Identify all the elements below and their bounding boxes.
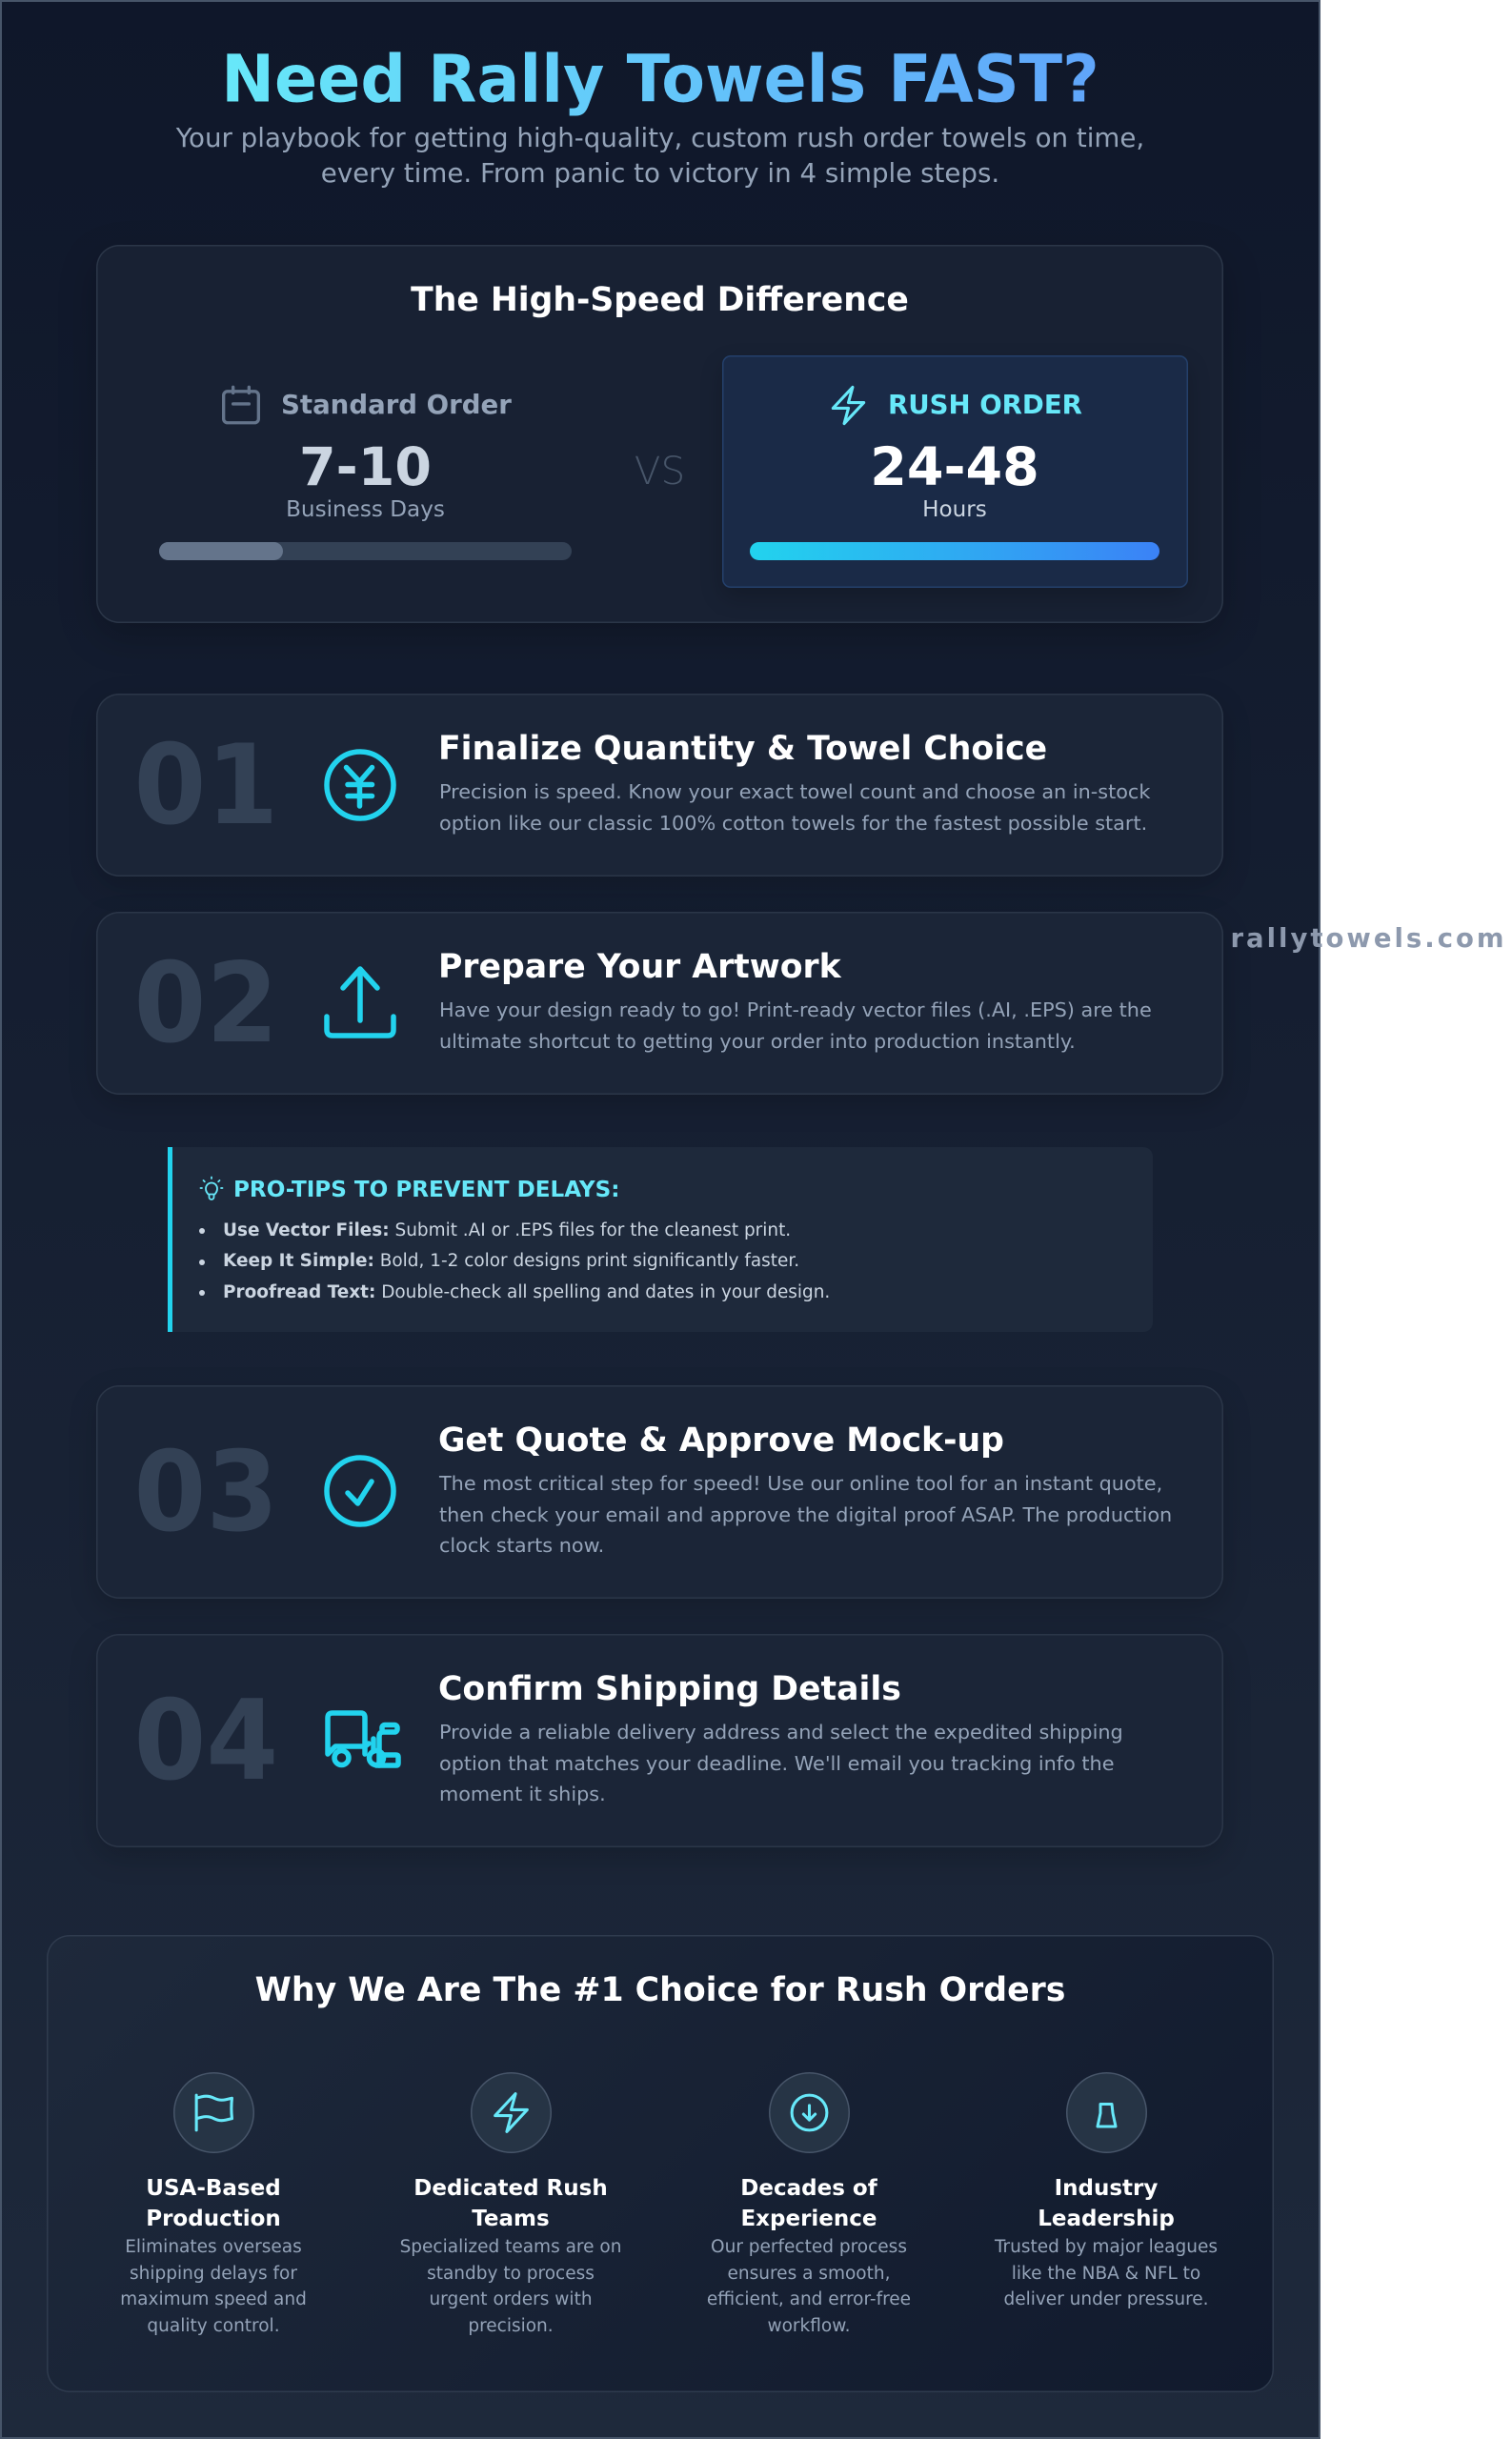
tip bullet list: [199, 1220, 830, 1301]
feature title: [1038, 2176, 1175, 2231]
feature title: Decades of: [740, 2176, 877, 2201]
callout heading: PRO-TIPS TO PREVENT DELAYS:: [233, 1178, 619, 1202]
subtitle: [175, 122, 1144, 189]
step number: 01: [133, 721, 278, 850]
feature description: standby to process: [427, 2264, 595, 2284]
rush order label: RUSH ORDER: [888, 389, 1082, 419]
step heading: Finalize Quantity & Towel Choice: [438, 730, 1047, 768]
icon: flag: [173, 2072, 253, 2153]
standard bar fill: [159, 541, 283, 560]
feature: industry leadership: [995, 2072, 1218, 2309]
feature description: [995, 2237, 1218, 2309]
vs label: VS: [635, 448, 685, 494]
icon: upload: [324, 966, 396, 1038]
callout accent bar: [168, 1147, 172, 1332]
tip two: Keep It Simple: Bold, 1-2 color designs print significantly faster.: [223, 1251, 799, 1271]
feature description: efficient, and error-free: [707, 2289, 911, 2309]
step 3: [96, 1385, 1223, 1599]
feature: decades of experience: [707, 2072, 911, 2336]
feature title: USA-Based: [146, 2176, 281, 2201]
subtitle: Your playbook for getting high-quality, custom rush order towels on time,: [176, 122, 1144, 153]
rush order time: 24-48: [870, 436, 1039, 497]
bullet: [199, 1260, 205, 1265]
feature description: [120, 2237, 307, 2336]
step description: Have your design ready to go! Print-ready vector files (.AI, .EPS) are the: [439, 998, 1152, 1021]
callout: pro tips: [168, 1147, 1153, 1332]
standard order time: 7-10: [299, 436, 432, 497]
step description: Precision is speed. Know your exact towel count and choose an in-stock: [439, 780, 1150, 803]
tip three: Proofread Text: Double-check all spelling and dates in your design.: [223, 1282, 830, 1301]
icon: trophy base: [1065, 2072, 1147, 2153]
panel: rush order: [722, 354, 1187, 587]
feature description: Specialized teams are on: [400, 2237, 621, 2257]
feature: dedicated rush teams: [400, 2072, 621, 2336]
standard order label: Standard Order: [281, 389, 512, 420]
panel heading: Why We Are The #1 Choice for Rush Orders: [255, 1970, 1065, 2008]
feature description: quality control.: [147, 2316, 280, 2336]
feature title: [740, 2176, 877, 2231]
feature title: Dedicated Rush: [413, 2176, 608, 2201]
rush order unit: Hours: [922, 497, 987, 522]
icon: lightning bolt: [471, 2072, 551, 2153]
feature description: Eliminates overseas: [125, 2237, 302, 2257]
step description: ultimate shortcut to getting your order into production instantly.: [439, 1029, 1076, 1052]
feature description: shipping delays for: [130, 2264, 297, 2284]
feature title: Industry: [1055, 2176, 1158, 2201]
feature title: [413, 2176, 608, 2231]
step number: 04: [133, 1677, 278, 1805]
feature title: [146, 2176, 281, 2231]
step description: [439, 1721, 1123, 1805]
step description: [438, 1472, 1172, 1557]
feature description: maximum speed and: [120, 2289, 307, 2309]
step 4: [96, 1634, 1223, 1846]
icon: calendar: [222, 385, 260, 425]
feature description: [400, 2237, 621, 2336]
step description: then check your email and approve the digital proof ASAP. The production: [439, 1503, 1172, 1526]
step 2: [96, 912, 1223, 1094]
title: Need Rally Towels FAST?: [221, 40, 1099, 117]
feature description: like the NBA & NFL to: [1012, 2264, 1200, 2284]
feature description: ensures a smooth,: [728, 2264, 890, 2284]
feature title: Experience: [740, 2207, 877, 2231]
step description: moment it ships.: [439, 1783, 606, 1805]
feature: USA-based production: [120, 2072, 307, 2336]
step description: clock starts now.: [439, 1534, 604, 1557]
comparison heading: The High-Speed Difference: [411, 280, 909, 318]
watermark: rallytowels.com: [1231, 922, 1507, 953]
feature description: deliver under pressure.: [1003, 2289, 1209, 2309]
bullet: [199, 1227, 205, 1233]
tip one: Use Vector Files: Submit .AI or .EPS files for the cleanest print.: [223, 1220, 791, 1240]
feature description: workflow.: [767, 2316, 851, 2336]
rush order progress bar: [750, 541, 1159, 560]
step number: 02: [133, 939, 278, 1068]
icon: arrow down circle: [768, 2072, 850, 2153]
icon: yen coin: [324, 749, 396, 821]
step description: [439, 998, 1152, 1052]
icon: light bulb: [200, 1176, 223, 1200]
step description: [439, 780, 1151, 835]
icon: shipping truck: [325, 1710, 401, 1768]
standard order unit: Business Days: [286, 497, 445, 522]
bullet: [199, 1290, 205, 1296]
feature description: precision.: [468, 2316, 554, 2336]
feature title: Production: [146, 2207, 281, 2231]
feature description: Trusted by major leagues: [995, 2237, 1218, 2257]
feature title: Leadership: [1038, 2207, 1175, 2231]
standard order progress bar: [159, 541, 572, 560]
feature description: [707, 2237, 911, 2336]
feature description: urgent orders with: [429, 2289, 593, 2309]
step 1: [96, 694, 1223, 877]
icon: lightning bolt: [831, 385, 865, 425]
feature description: Our perfected process: [711, 2237, 907, 2257]
step heading: Confirm Shipping Details: [438, 1670, 901, 1708]
step heading: Get Quote & Approve Mock-up: [438, 1421, 1004, 1460]
step heading: Prepare Your Artwork: [438, 948, 841, 986]
feature title: Teams: [472, 2207, 550, 2231]
step number: 03: [133, 1428, 278, 1557]
step description: The most critical step for speed! Use our online tool for an instant quote,: [439, 1472, 1162, 1495]
panel: the high-speed difference: [96, 244, 1223, 623]
step description: Provide a reliable delivery address and select the expedited shipping: [439, 1721, 1123, 1744]
step description: option like our classic 100% cotton towels for the fastest possible start.: [439, 812, 1147, 835]
step description: option that matches your deadline. We'll email you tracking info the: [439, 1751, 1115, 1774]
subtitle: every time. From panic to victory in 4 simple steps.: [321, 157, 999, 189]
icon: check circle: [324, 1455, 396, 1527]
panel: why choose us: [47, 1935, 1274, 2392]
